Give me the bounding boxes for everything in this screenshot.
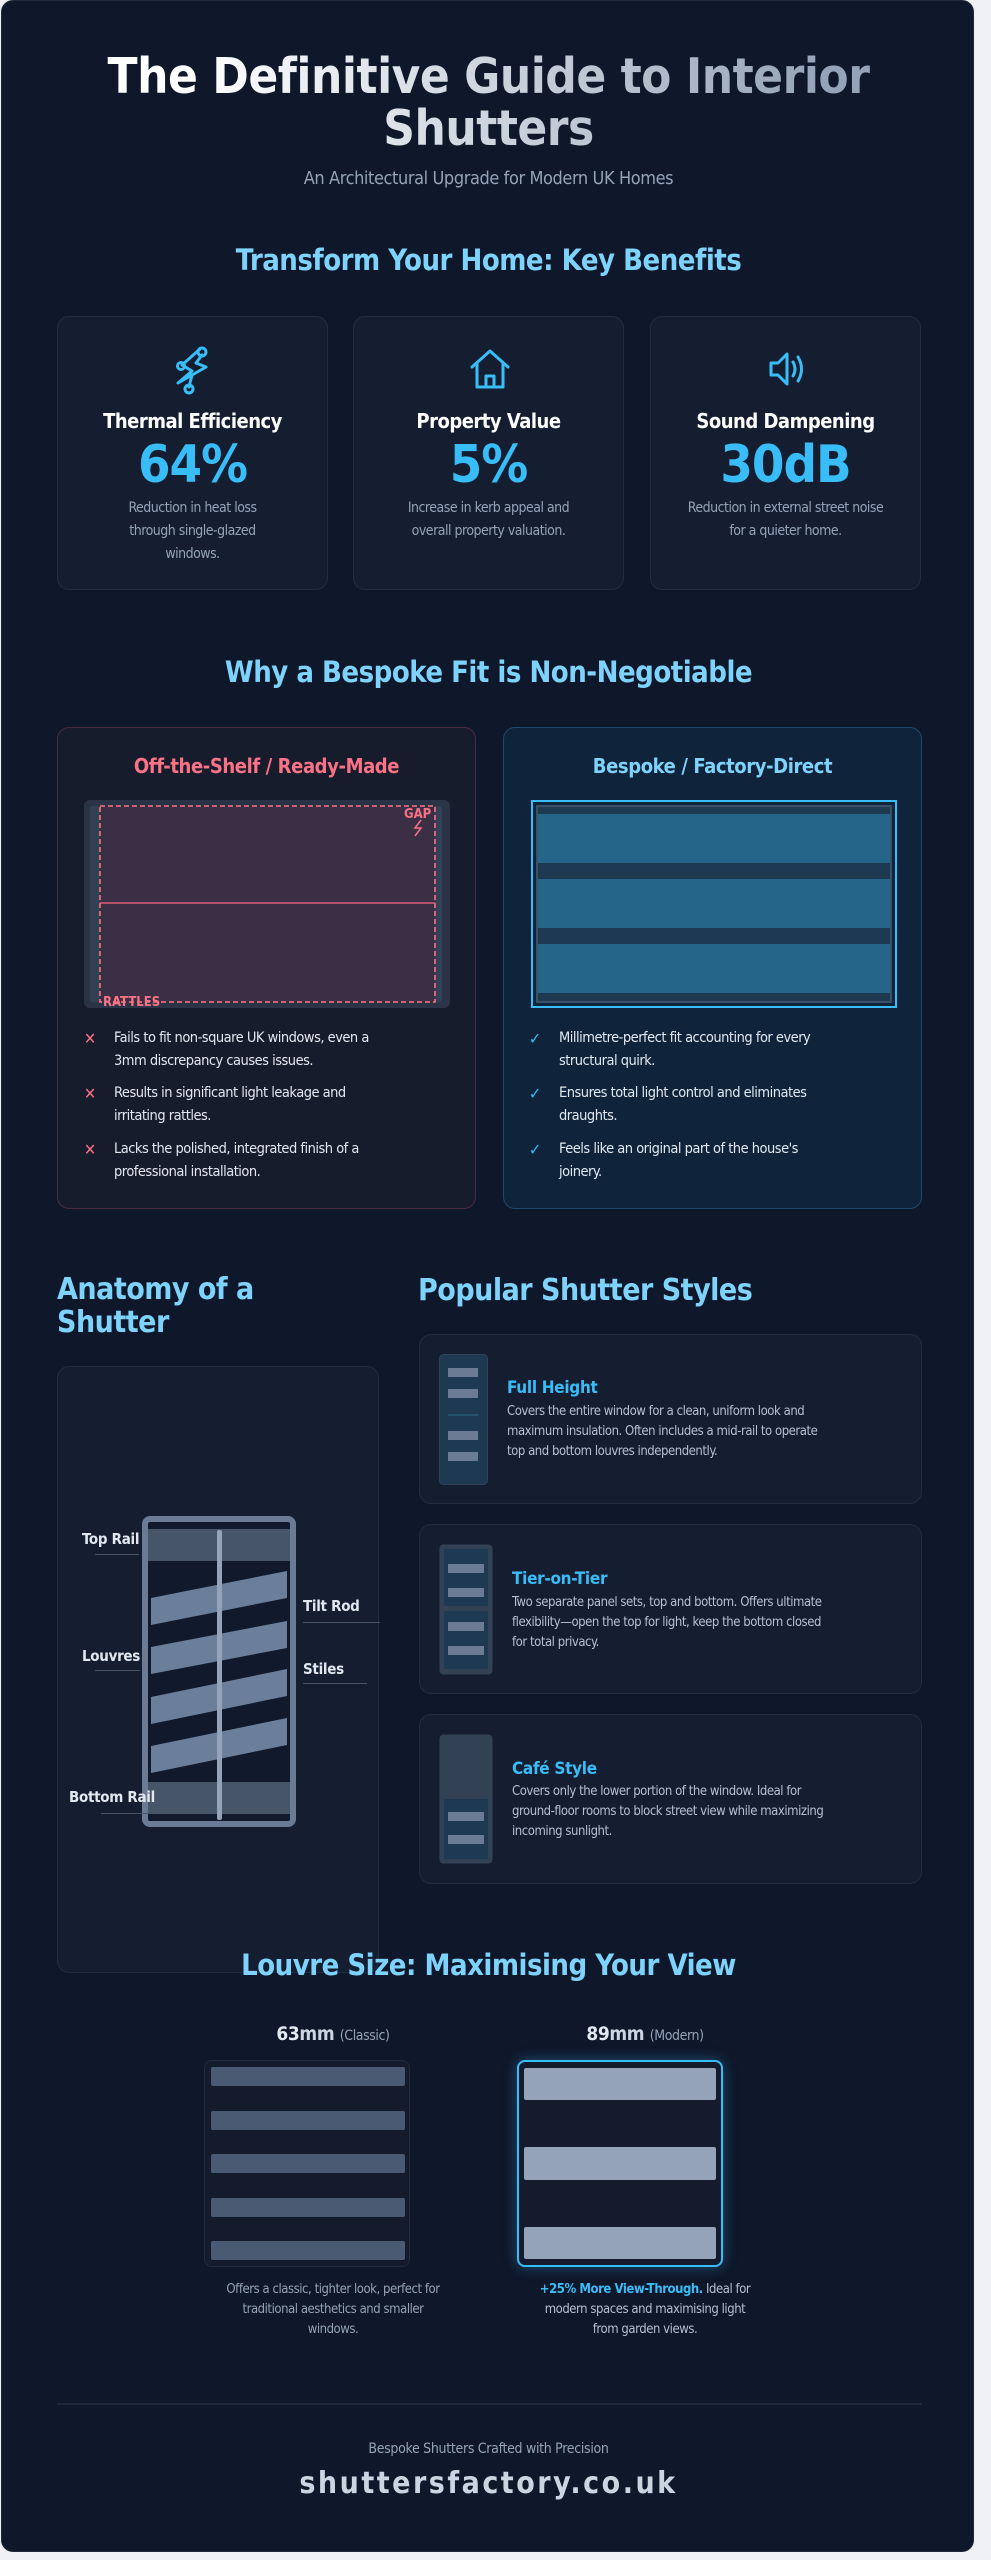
- heading: bespoke fit: Why a Bespoke Fit is Non-Negotiable: [225, 655, 752, 689]
- panel: anatomy diagram: [57, 1366, 379, 1973]
- stat value: 30dB: [720, 435, 851, 495]
- style description: [507, 1404, 818, 1459]
- style description: Covers only the lower portion of the window. Ideal for: [512, 1784, 801, 1799]
- text: modern description: modern spaces and maximising light: [545, 2302, 745, 2317]
- label: top rail: Top Rail: [82, 1530, 139, 1548]
- panel title: Off-the-Shelf / Ready-Made: [134, 754, 399, 778]
- list item: Millimetre-perfect fit accounting for every structural quirk.: [559, 1030, 810, 1069]
- icon: thermal bolt: [176, 346, 208, 394]
- label: stiles: Stiles: [303, 1660, 344, 1678]
- style title: Tier-on-Tier: [512, 1569, 607, 1589]
- style description: incoming sunlight.: [512, 1824, 612, 1839]
- icon: full height shutter: [439, 1354, 488, 1485]
- style description: Covers the entire window for a clean, uniform look and: [507, 1404, 804, 1419]
- style card: full height: [419, 1334, 922, 1504]
- stat title: Sound Dampening: [696, 409, 875, 433]
- stat description: Reduction in external street noise for a quieter home.: [688, 500, 883, 539]
- panel: off-the-shelf: ✕: [84, 1084, 96, 1103]
- title: [2, 51, 975, 155]
- text: classic description: traditional aesthetics and smaller: [242, 2302, 424, 2317]
- heading: key benefits: Transform Your Home: Key Benefits: [236, 243, 741, 277]
- text: modern description: from garden views.: [593, 2322, 697, 2337]
- style card: cafe: [419, 1714, 922, 1884]
- panel: off-the-shelf: ✕: [84, 1029, 96, 1048]
- text: modern description: +25% More View-Through. Ideal for: [540, 2282, 750, 2297]
- style description: for total privacy.: [512, 1635, 599, 1650]
- text: classic description: Offers a classic, tighter look, perfect for: [226, 2282, 440, 2297]
- label: 89mm: 89mm (Modern): [586, 2023, 704, 2045]
- style description: maximum insulation. Often includes a mid-rail to operate: [507, 1424, 817, 1439]
- panel: sound dampening: [650, 316, 921, 590]
- stat title: Thermal Efficiency: [103, 409, 282, 433]
- stat value: 5%: [450, 435, 527, 495]
- icon: speaker: [770, 352, 803, 386]
- label: louvres: Louvres: [82, 1647, 140, 1665]
- icon: house: [470, 349, 510, 388]
- style description: flexibility—open the top for light, keep the bottom closed: [512, 1615, 821, 1630]
- style description: ground-floor rooms to block street view while maximizing: [512, 1804, 823, 1819]
- style title: Full Height: [507, 1378, 598, 1398]
- style title: Café Style: [512, 1759, 597, 1779]
- text: classic description: windows.: [308, 2322, 358, 2337]
- heading: popular styles: Popular Shutter Styles: [418, 1273, 752, 1308]
- style description: Two separate panel sets, top and bottom. Offers ultimate: [512, 1595, 822, 1610]
- text: classic description: [226, 2282, 440, 2337]
- style description: [512, 1595, 822, 1650]
- list item: Lacks the polished, integrated finish of a professional installation.: [114, 1141, 359, 1180]
- panel: thermal efficiency: [57, 316, 328, 590]
- list item: Fails to fit non-square UK windows, even a 3mm discrepancy causes issues.: [114, 1030, 369, 1069]
- style card: tier-on-tier: [419, 1524, 922, 1694]
- panel: property value: [353, 316, 624, 590]
- illustration: ill-fitting shutter: GAP: [404, 807, 432, 822]
- list item: Ensures total light control and eliminates draughts.: [559, 1085, 806, 1124]
- panel: off-the-shelf: ✕: [84, 1140, 96, 1159]
- label: bottom rail: Bottom Rail: [69, 1788, 155, 1806]
- footer tagline: Bespoke Shutters Crafted with Precision: [368, 2441, 609, 2457]
- illustration: ill-fitting shutter: [84, 800, 450, 1008]
- style description: top and bottom louvres independently.: [507, 1444, 717, 1459]
- stat title: Property Value: [416, 409, 561, 433]
- list item: Feels like an original part of the house's joinery.: [559, 1141, 798, 1180]
- panel: bespoke: ✓: [529, 1029, 541, 1048]
- panel: off-the-shelf: [57, 727, 476, 1209]
- chart: modern louvres: [517, 2060, 723, 2267]
- style description: [512, 1784, 823, 1839]
- panel: bespoke: [503, 727, 922, 1209]
- text: modern description: [540, 2282, 751, 2337]
- heading: anatomy: Shutter: [57, 1305, 169, 1340]
- heading: anatomy: [57, 1272, 254, 1340]
- title: The Definitive Guide to Interior: [108, 48, 869, 105]
- shutter diagram: [142, 1516, 296, 1827]
- stat description: Increase in kerb appeal and overall property valuation.: [408, 500, 569, 539]
- panel title: Bespoke / Factory-Direct: [593, 754, 832, 778]
- list item: Results in significant light leakage and irritating rattles.: [114, 1085, 346, 1124]
- title: Shutters: [383, 100, 594, 157]
- illustration: perfect-fit shutter: [531, 800, 897, 1008]
- footer url: shuttersfactory.co.uk: [299, 2466, 678, 2501]
- label: 63mm: 63mm (Classic): [276, 2023, 390, 2045]
- icon: cafe shutter: [440, 1734, 492, 1864]
- heading: anatomy: Anatomy of a: [57, 1272, 254, 1307]
- panel: bespoke: ✓: [529, 1084, 541, 1103]
- stat description: Reduction in heat loss through single-glazed windows.: [128, 500, 257, 562]
- panel: bespoke: ✓: [529, 1140, 541, 1159]
- chart: classic louvres: [204, 2060, 410, 2267]
- subtitle: An Architectural Upgrade for Modern UK Homes: [304, 168, 673, 189]
- heading: louvre size: Louvre Size: Maximising Your View: [241, 1948, 736, 1982]
- stat value: 64%: [138, 435, 247, 495]
- label: tilt rod: Tilt Rod: [303, 1597, 360, 1615]
- icon: tier-on-tier shutter: [440, 1544, 492, 1674]
